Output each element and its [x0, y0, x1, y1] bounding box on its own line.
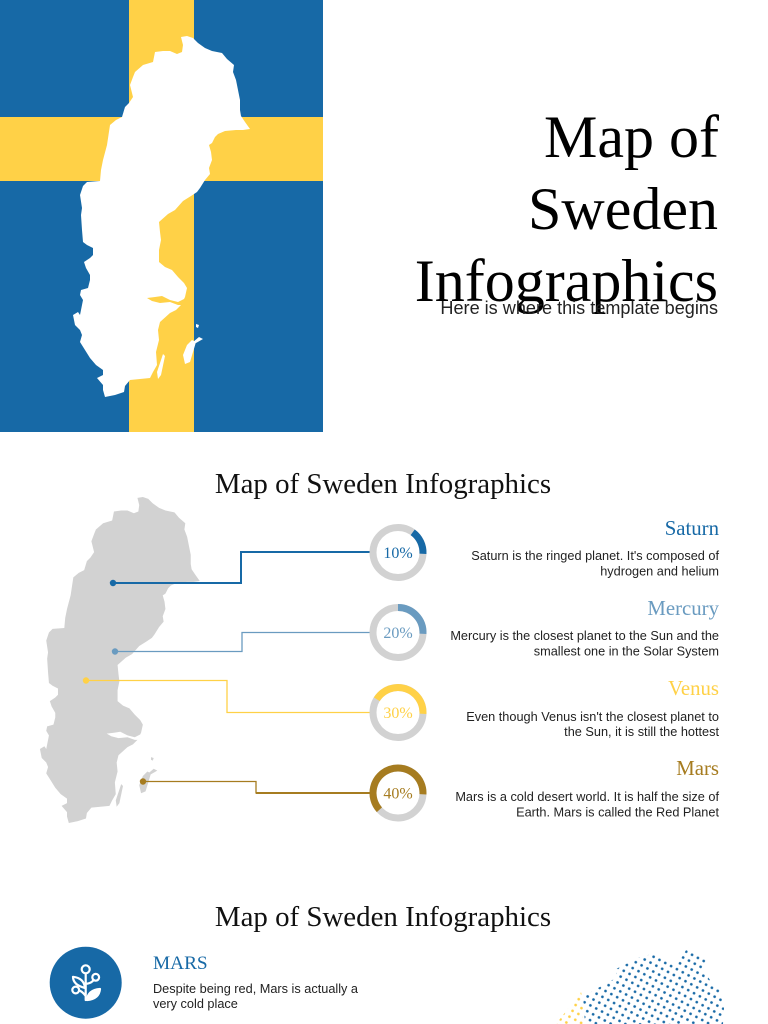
- donut: 40%: 40%: [383, 786, 413, 802]
- panel: Swedish flag with map: [0, 0, 323, 432]
- text block: Mars feature: Despite being red, Mars is actually a: [153, 981, 359, 996]
- icon: plant in blue circle: [50, 947, 122, 1019]
- text block: Saturn: [471, 517, 720, 578]
- flag background: [0, 0, 323, 432]
- grey map of Sweden: [40, 497, 200, 823]
- title: [415, 104, 719, 314]
- subtitle: Here is where this template begins: [440, 298, 718, 318]
- donut: 10%: [373, 528, 423, 578]
- donut: 20%: [373, 608, 423, 658]
- donut: 10%: 10%: [383, 545, 413, 562]
- donut: 40%: [373, 768, 423, 818]
- text block: Saturn: hydrogen and helium: [600, 564, 719, 578]
- white map of Sweden: [73, 36, 250, 397]
- text block: Mars: Earth. Mars is called the Red Planet: [516, 804, 719, 820]
- text block: Mars: Mars: [676, 757, 719, 780]
- text block: Mercury: smallest one in the Solar System: [534, 644, 719, 658]
- text block: Venus: the Sun, it is still the hottest: [564, 724, 719, 739]
- text block: Mercury: Mercury is the closest planet to the Sun and the: [450, 628, 719, 643]
- text block: Venus: Even though Venus isn't the closest planet to: [466, 709, 719, 724]
- donut: 30%: [373, 688, 423, 738]
- text block: Venus: [466, 677, 719, 739]
- text block: Mars feature: MARS: [153, 953, 208, 974]
- text block: Saturn: Saturn: [665, 517, 720, 540]
- flag cross: [0, 0, 323, 432]
- title: Map of: [544, 104, 719, 170]
- connector: Mercury: [112, 632, 370, 655]
- dotted map decoration: [556, 947, 724, 1024]
- text block: Mars feature: [153, 953, 359, 1011]
- text block: Mercury: [450, 597, 720, 658]
- text block: Mars: Mars is a cold desert world. It is half the size of: [455, 789, 719, 804]
- connector: Saturn: [110, 552, 370, 586]
- text block: Mercury: Mercury: [647, 597, 720, 620]
- heading: section 3: Map of Sweden Infographics: [215, 901, 551, 933]
- text block: Saturn: Saturn is the ringed planet. It's composed of: [471, 548, 719, 563]
- connector: Venus: [83, 677, 370, 712]
- text block: Mars: [455, 757, 719, 820]
- connector: Mars: [140, 778, 370, 793]
- text block: Venus: Venus: [668, 677, 719, 700]
- title: Sweden: [528, 176, 718, 242]
- donut: 20%: 20%: [383, 625, 413, 642]
- heading: section 2: Map of Sweden Infographics: [215, 468, 551, 500]
- text block: Mars feature: very cold place: [153, 996, 238, 1011]
- title: Infographics: [415, 248, 718, 314]
- donut: 30%: 30%: [383, 705, 413, 722]
